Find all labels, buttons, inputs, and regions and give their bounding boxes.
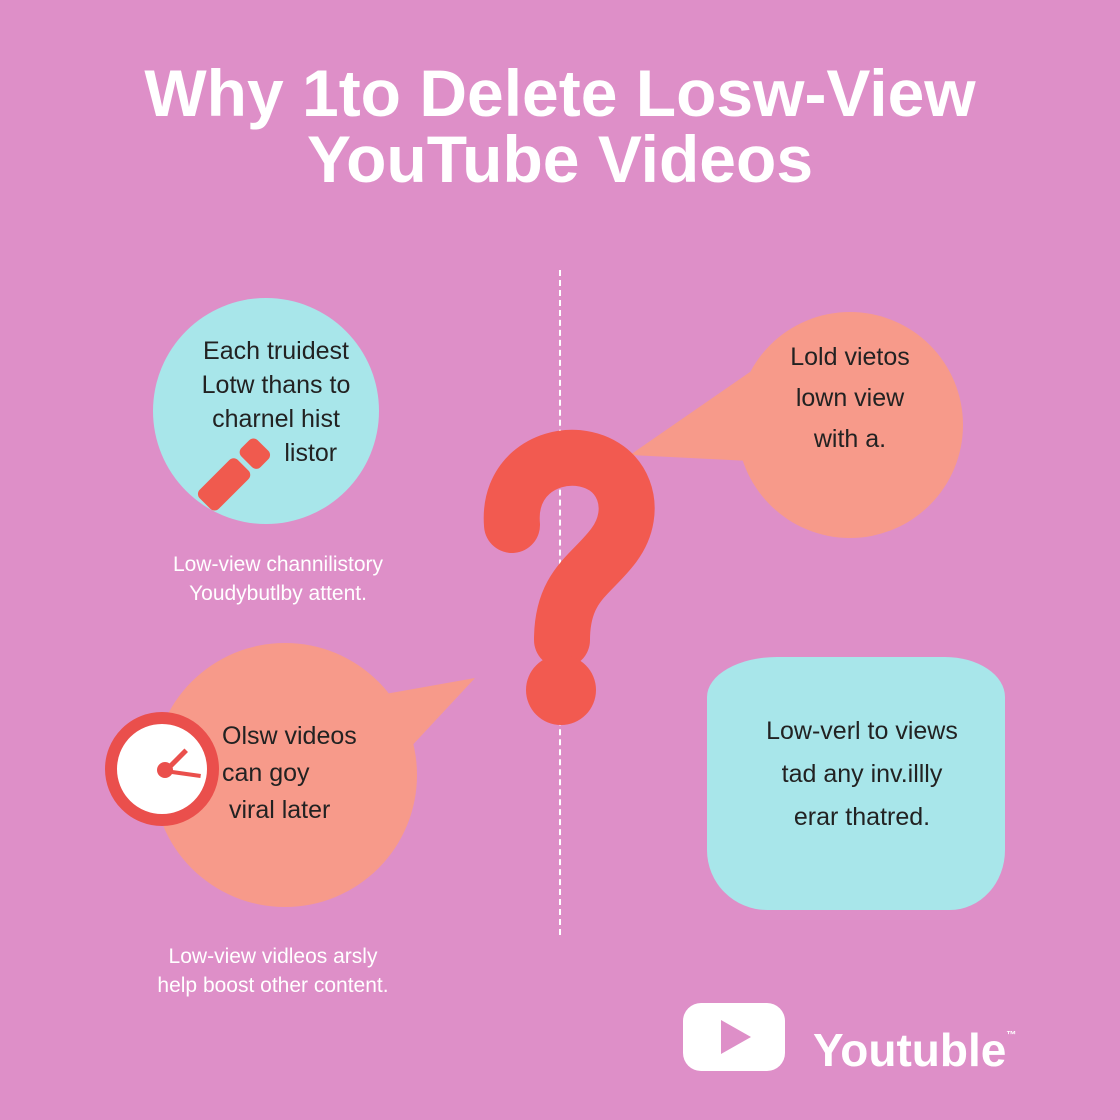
text: top-left bbox=[202, 337, 350, 467]
text: logo: Youtuble™ bbox=[813, 1024, 1016, 1076]
panel: top-left circle bbox=[153, 298, 379, 524]
text: bottom-left: Olsw videos bbox=[222, 722, 357, 750]
icon: play button bbox=[683, 1003, 785, 1071]
text: bottom-left: viral later bbox=[229, 796, 330, 824]
caption: top-left: Youdybutlby attent. bbox=[189, 582, 367, 605]
panel: bottom-left bubble bbox=[163, 643, 475, 907]
icon: clock bbox=[105, 712, 219, 826]
text: top-right: lown view bbox=[796, 384, 904, 412]
caption: bottom-left: help boost other content. bbox=[157, 974, 389, 997]
caption: bottom-left bbox=[157, 945, 389, 997]
title bbox=[144, 56, 976, 196]
text: bottom-left: can goy bbox=[222, 759, 310, 787]
title: Why 1to Delete Losw-View bbox=[144, 56, 976, 130]
logo: youtube bbox=[683, 1003, 1016, 1076]
caption: bottom-left: Low-view vidleos arsly bbox=[169, 945, 377, 968]
text: top-left: charnel hist bbox=[212, 405, 340, 433]
text: top-left: Lotw thans to bbox=[202, 371, 350, 399]
text: bottom-right: erar thatred. bbox=[794, 803, 930, 831]
text: top-left: Each truidest bbox=[203, 337, 349, 365]
panel: top-right bubble bbox=[632, 312, 963, 538]
caption: top-left bbox=[173, 553, 383, 605]
text: top-right bbox=[790, 343, 910, 453]
text: bottom-right bbox=[766, 717, 958, 831]
text: top-left: listor bbox=[284, 439, 337, 467]
text: bottom-right: Low-verl to views bbox=[766, 717, 958, 745]
text: bottom-left bbox=[222, 722, 357, 824]
text: top-right: with a. bbox=[814, 425, 886, 453]
caption: top-left: Low-view channilistory bbox=[173, 553, 383, 576]
icon: pill bbox=[198, 438, 270, 510]
title: YouTube Videos bbox=[307, 122, 813, 196]
text: top-right: Lold vietos bbox=[790, 343, 910, 371]
text: bottom-right: tad any inv.illly bbox=[782, 760, 942, 788]
divider bbox=[559, 270, 561, 935]
panel: bottom-right blob bbox=[707, 657, 1005, 910]
